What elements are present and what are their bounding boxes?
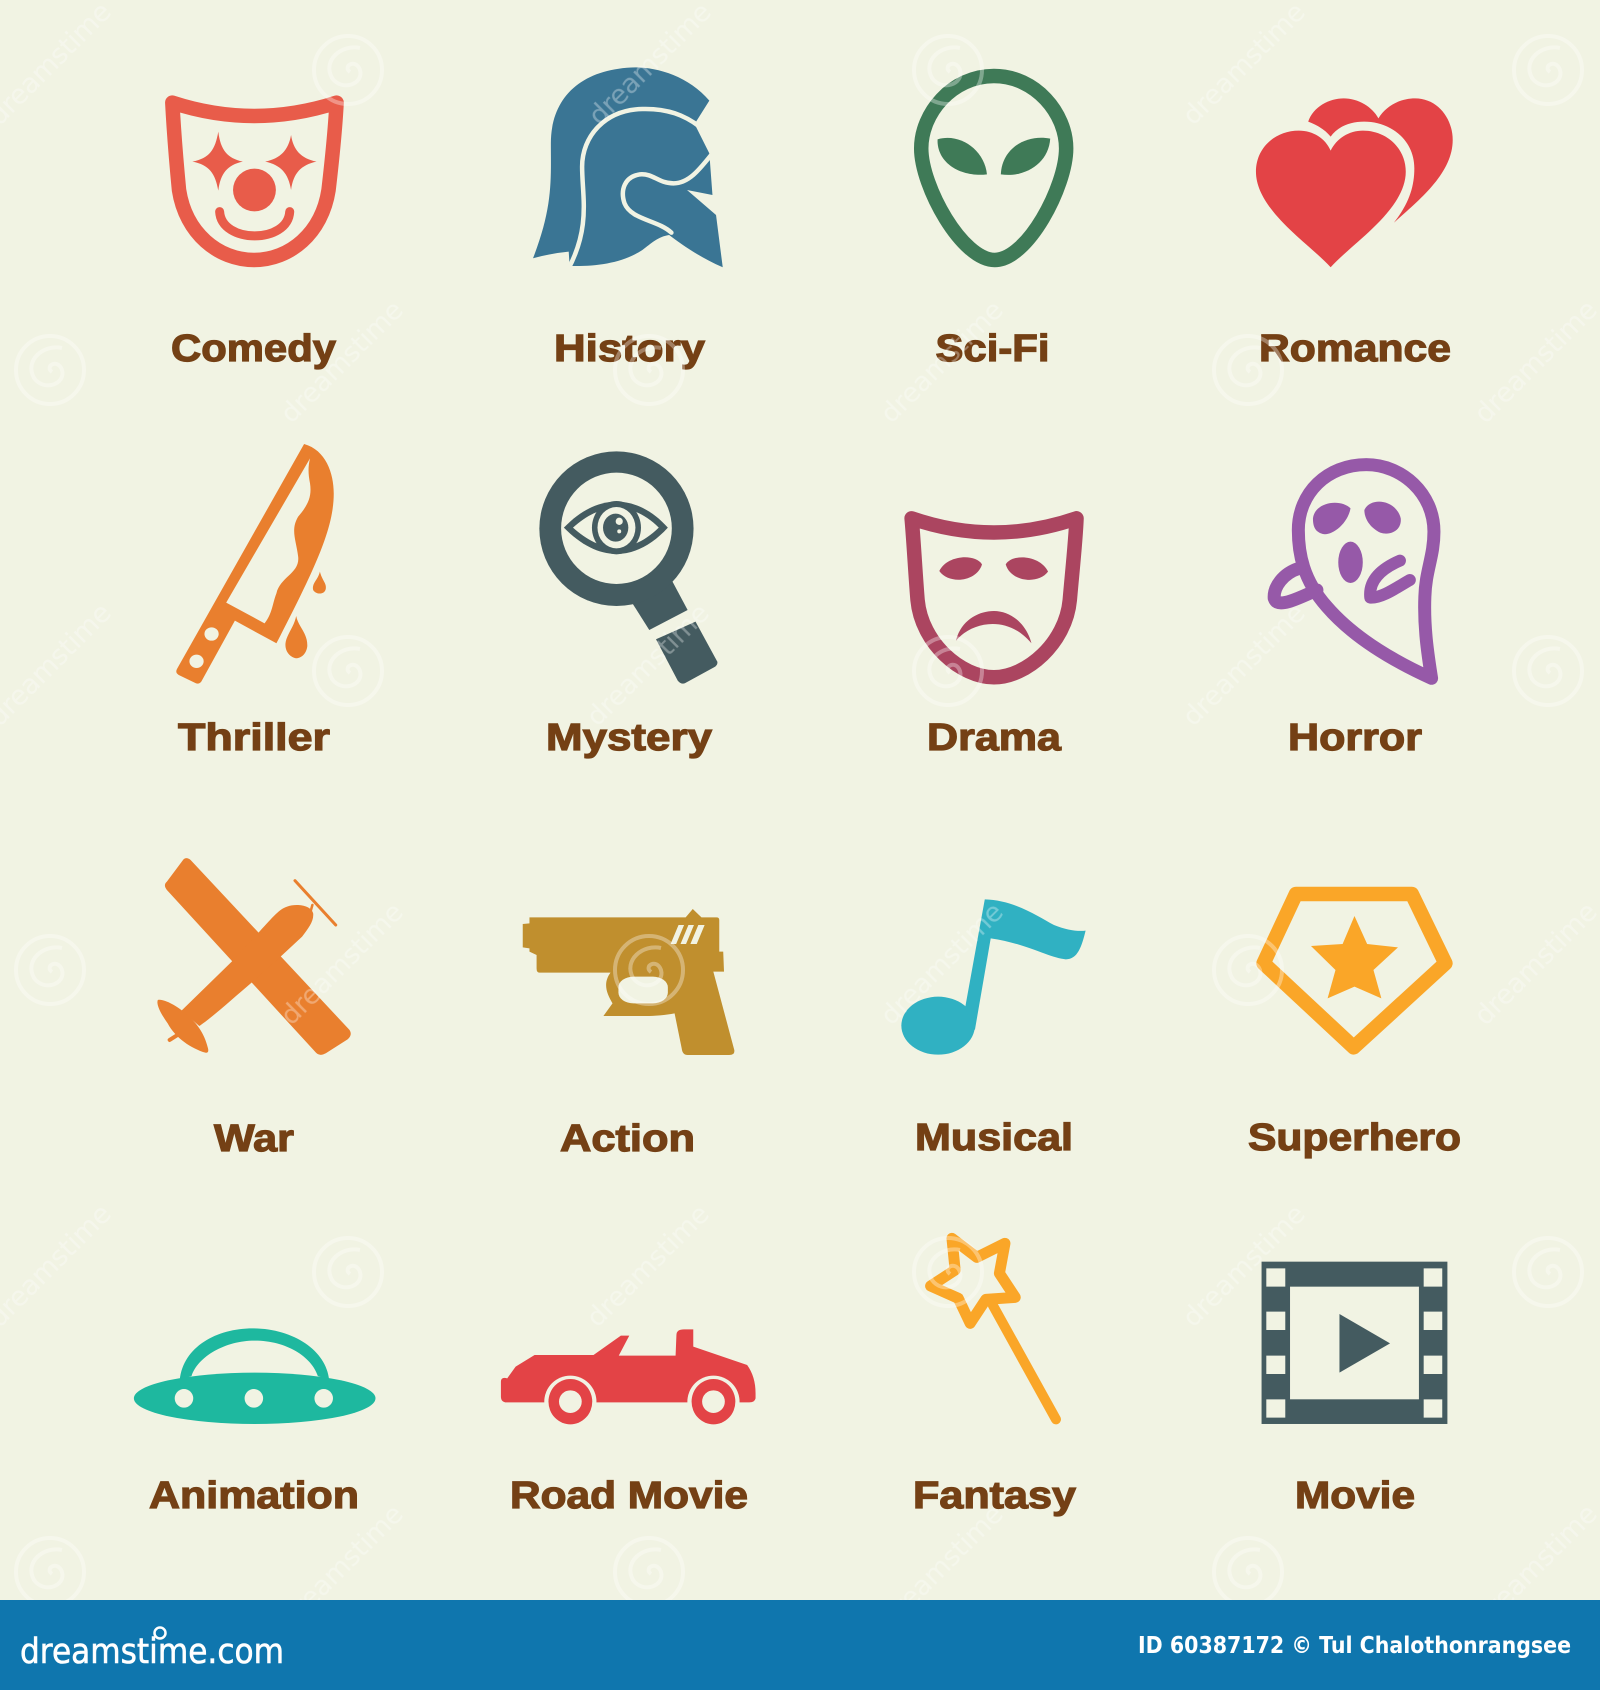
label: Movie: Movie — [1295, 1475, 1415, 1517]
panel: movie — [1262, 1262, 1447, 1517]
watermark: diagonal text marks: dreamstime — [274, 896, 410, 1032]
panel: musical — [901, 899, 1086, 1159]
label: Action: Action — [560, 1118, 695, 1160]
icon: pistol — [523, 909, 734, 1055]
label: War: War — [214, 1118, 294, 1160]
label: Sci-Fi: Sci-Fi — [936, 328, 1050, 370]
icon: music note — [901, 899, 1086, 1055]
panel: horror — [1274, 465, 1434, 759]
watermark: diagonal text marks: dreamstime — [874, 294, 1010, 430]
icon: magnifier with eye — [539, 451, 717, 684]
label: Comedy: Comedy — [171, 328, 336, 370]
watermark: diagonal text marks: dreamstime — [1176, 597, 1312, 733]
icon: convertible car — [501, 1329, 756, 1428]
watermark: diagonal text marks: dreamstime — [1176, 1198, 1312, 1334]
panel: animation — [134, 1328, 375, 1517]
icon: pentagon star badge — [1264, 894, 1445, 1047]
panel: drama — [912, 518, 1077, 759]
watermark: diagonal text marks: dreamstime — [580, 1198, 716, 1334]
label: Animation: Animation — [149, 1475, 359, 1517]
panel: thriller — [176, 444, 334, 759]
icon: biplane — [157, 858, 351, 1055]
label: Musical: Musical — [915, 1117, 1073, 1159]
icon: ghost — [1274, 465, 1434, 678]
panel: fantasy — [913, 1238, 1076, 1517]
label: Horror: Horror — [1288, 717, 1422, 759]
icon: film strip with play button — [1262, 1262, 1447, 1424]
watermark: diagonal text marks: dreamstime — [1468, 1498, 1600, 1634]
watermark: diagonal text marks: dreamstime — [1176, 0, 1312, 132]
panel: war — [157, 858, 351, 1160]
panel: action — [523, 909, 734, 1160]
icon: flying saucer — [134, 1328, 375, 1424]
label: Road Movie: Road Movie — [510, 1475, 748, 1517]
icon: magic wand — [931, 1238, 1056, 1419]
watermark: diagonal text marks: dreamstime — [874, 1498, 1010, 1634]
watermark: diagonal text marks: dreamstime — [1468, 294, 1600, 430]
label: Drama: Drama — [927, 717, 1062, 759]
panel: romance — [1256, 98, 1453, 370]
label: Mystery: Mystery — [546, 717, 712, 759]
icon: alien head — [921, 76, 1066, 260]
label: Fantasy: Fantasy — [913, 1475, 1076, 1517]
label: History: History — [554, 328, 705, 370]
watermark: diagonal text marks: dreamstime — [580, 597, 716, 733]
footer logo: dreamstime.com: dreamstime.com — [20, 1632, 284, 1672]
panel: history — [533, 67, 723, 370]
icon: clown mask — [172, 103, 337, 260]
label: Romance: Romance — [1259, 328, 1451, 370]
footer bar — [0, 1600, 1600, 1690]
icon: spartan helmet — [533, 67, 723, 270]
panel: mystery — [539, 451, 717, 759]
icon: bloody knife — [176, 444, 334, 684]
watermark: diagonal text marks: dreamstime — [274, 1498, 410, 1634]
watermark: diagonal text marks: dreamstime — [874, 896, 1010, 1032]
icon: sad theatre mask — [912, 518, 1077, 677]
panel: sci-fi — [921, 76, 1066, 370]
label: Superhero: Superhero — [1248, 1117, 1461, 1159]
panel: road movie — [501, 1329, 756, 1517]
watermark: diagonal text marks: dreamstime — [274, 294, 410, 430]
panel: superhero — [1248, 894, 1461, 1159]
panel: comedy — [171, 103, 337, 370]
label: Thriller: Thriller — [178, 717, 330, 759]
watermark: diagonal text marks: dreamstime — [1468, 896, 1600, 1032]
watermark: diagonal text marks: dreamstime — [582, 0, 718, 132]
icon: two hearts — [1256, 98, 1453, 267]
